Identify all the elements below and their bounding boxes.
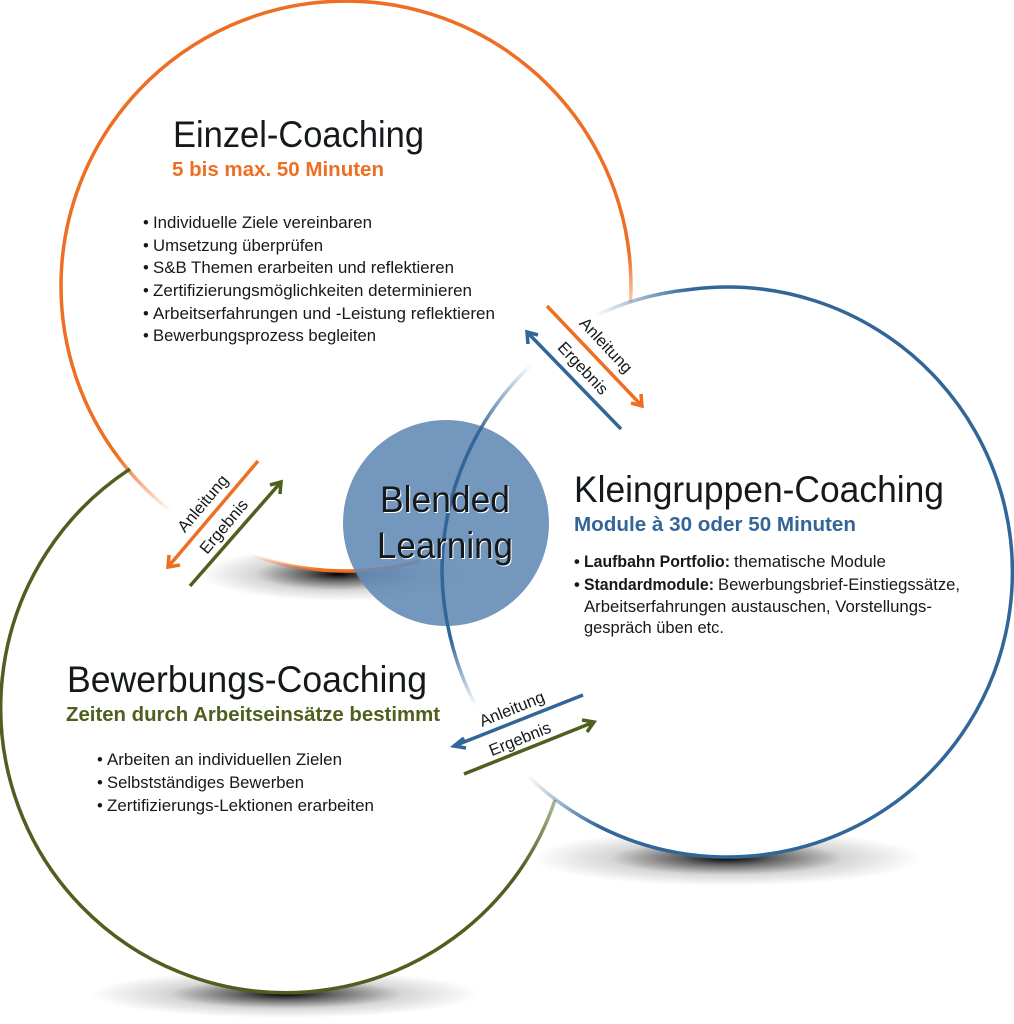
bullet list: •	[143, 214, 149, 232]
bullet list: S&B Themen erarbeiten und reflektieren	[153, 259, 454, 277]
bullet list: Zertifizierungs-Lektionen erarbeiten	[107, 797, 374, 815]
white mask: Einzel-Coaching interior	[61, 1, 631, 571]
heading: Kleingruppen-Coaching	[574, 469, 944, 510]
arrow: Anleitung orange	[168, 461, 258, 567]
centre circle: Blended Learning disc	[343, 420, 549, 626]
label: Ergebnis: Ergebnis	[196, 496, 252, 558]
bullet list: •	[574, 576, 580, 594]
bullet list: Individuelle Ziele vereinbaren	[153, 214, 372, 232]
bullet list: Arbeitserfahrungen austauschen, Vorstellungs-	[584, 598, 932, 616]
arrow: Anleitung orange	[547, 306, 642, 406]
bullet list	[143, 214, 495, 345]
label: Ergebnis: Ergebnis	[487, 719, 554, 760]
arrow: Ergebnis green	[190, 482, 281, 586]
subheading: Module à 30 oder 50 Minuten	[574, 514, 856, 536]
centre label: Blended Learning: Learning	[377, 525, 513, 566]
bullet list: •	[143, 305, 149, 323]
arrows: Kleingruppen to Bewerbungs	[454, 695, 594, 774]
heading: Bewerbungs-Coaching	[67, 659, 427, 700]
bullet list: Laufbahn Portfolio:	[584, 553, 730, 571]
arrow: Ergebnis blue	[527, 332, 621, 429]
white mask: Kleingruppen-Coaching interior	[442, 287, 1012, 857]
bullet list: Standardmodule:	[584, 576, 714, 594]
label: Ergebnis: Ergebnis	[554, 339, 611, 399]
circle outline: Einzel-Coaching	[61, 1, 631, 571]
bullet list: •	[97, 774, 103, 792]
panel: Einzel-Coaching	[143, 114, 495, 345]
circle outline: Kleingruppen-Coaching	[442, 287, 1012, 857]
subheading: Zeiten durch Arbeitseinsätze bestimmt	[66, 704, 440, 726]
bullet list: •	[143, 259, 149, 277]
arrows: Einzel to Kleingruppen	[527, 306, 642, 429]
bullet list: thematische Module	[734, 553, 886, 571]
bullet list: •	[574, 553, 580, 571]
bullet list: Umsetzung überprüfen	[153, 237, 323, 255]
bullet list: Bewerbungsprozess begleiten	[153, 327, 376, 345]
bullet list: Zertifizierungsmöglichkeiten determinieren	[153, 282, 472, 300]
arrows: Einzel to Bewerbungs	[168, 461, 281, 586]
bullet list: Arbeiten an individuellen Zielen	[107, 751, 342, 769]
bullet list	[97, 751, 374, 815]
label: Anleitung: Anleitung	[576, 314, 636, 377]
circle outline: Bewerbungs-Coaching	[1, 469, 555, 993]
bullet list: Arbeitserfahrungen und -Leistung reflektieren	[153, 305, 495, 323]
panel: Kleingruppen-Coaching	[574, 469, 960, 637]
panel: Bewerbungs-Coaching	[66, 659, 440, 815]
heading: Einzel-Coaching	[173, 114, 424, 155]
label: Anleitung: Anleitung	[477, 688, 547, 731]
bullet list: gespräch üben etc.	[584, 619, 724, 637]
shadow: Einzel-Coaching circle	[200, 547, 476, 601]
bullet list: Selbstständiges Bewerben	[107, 774, 304, 792]
bullet list: •	[97, 797, 103, 815]
white mask: Bewerbungs-Coaching interior	[0, 423, 570, 993]
subheading: 5 bis max. 50 Minuten	[172, 159, 384, 181]
bullet list: •	[143, 237, 149, 255]
arrow: Anleitung blue	[454, 695, 583, 748]
bullet list: •	[143, 327, 149, 345]
shadow: Kleingruppen-Coaching circle	[532, 830, 922, 886]
bullet list: •	[97, 751, 103, 769]
label: Anleitung: Anleitung	[174, 472, 232, 536]
centre label: Blended Learning: Blended	[380, 479, 510, 520]
bullet list: Bewerbungsbrief-Einstiegssätze,	[718, 576, 960, 594]
centre label: Blended Learning: Blended	[381, 480, 511, 521]
shadow: Bewerbungs-Coaching circle	[90, 970, 480, 1018]
arrow: Ergebnis green	[464, 720, 594, 774]
bullet list: •	[143, 282, 149, 300]
bullet list	[574, 553, 960, 637]
centre label: Blended Learning: Learning	[378, 526, 514, 567]
centre label: Blended Learning	[377, 479, 514, 567]
